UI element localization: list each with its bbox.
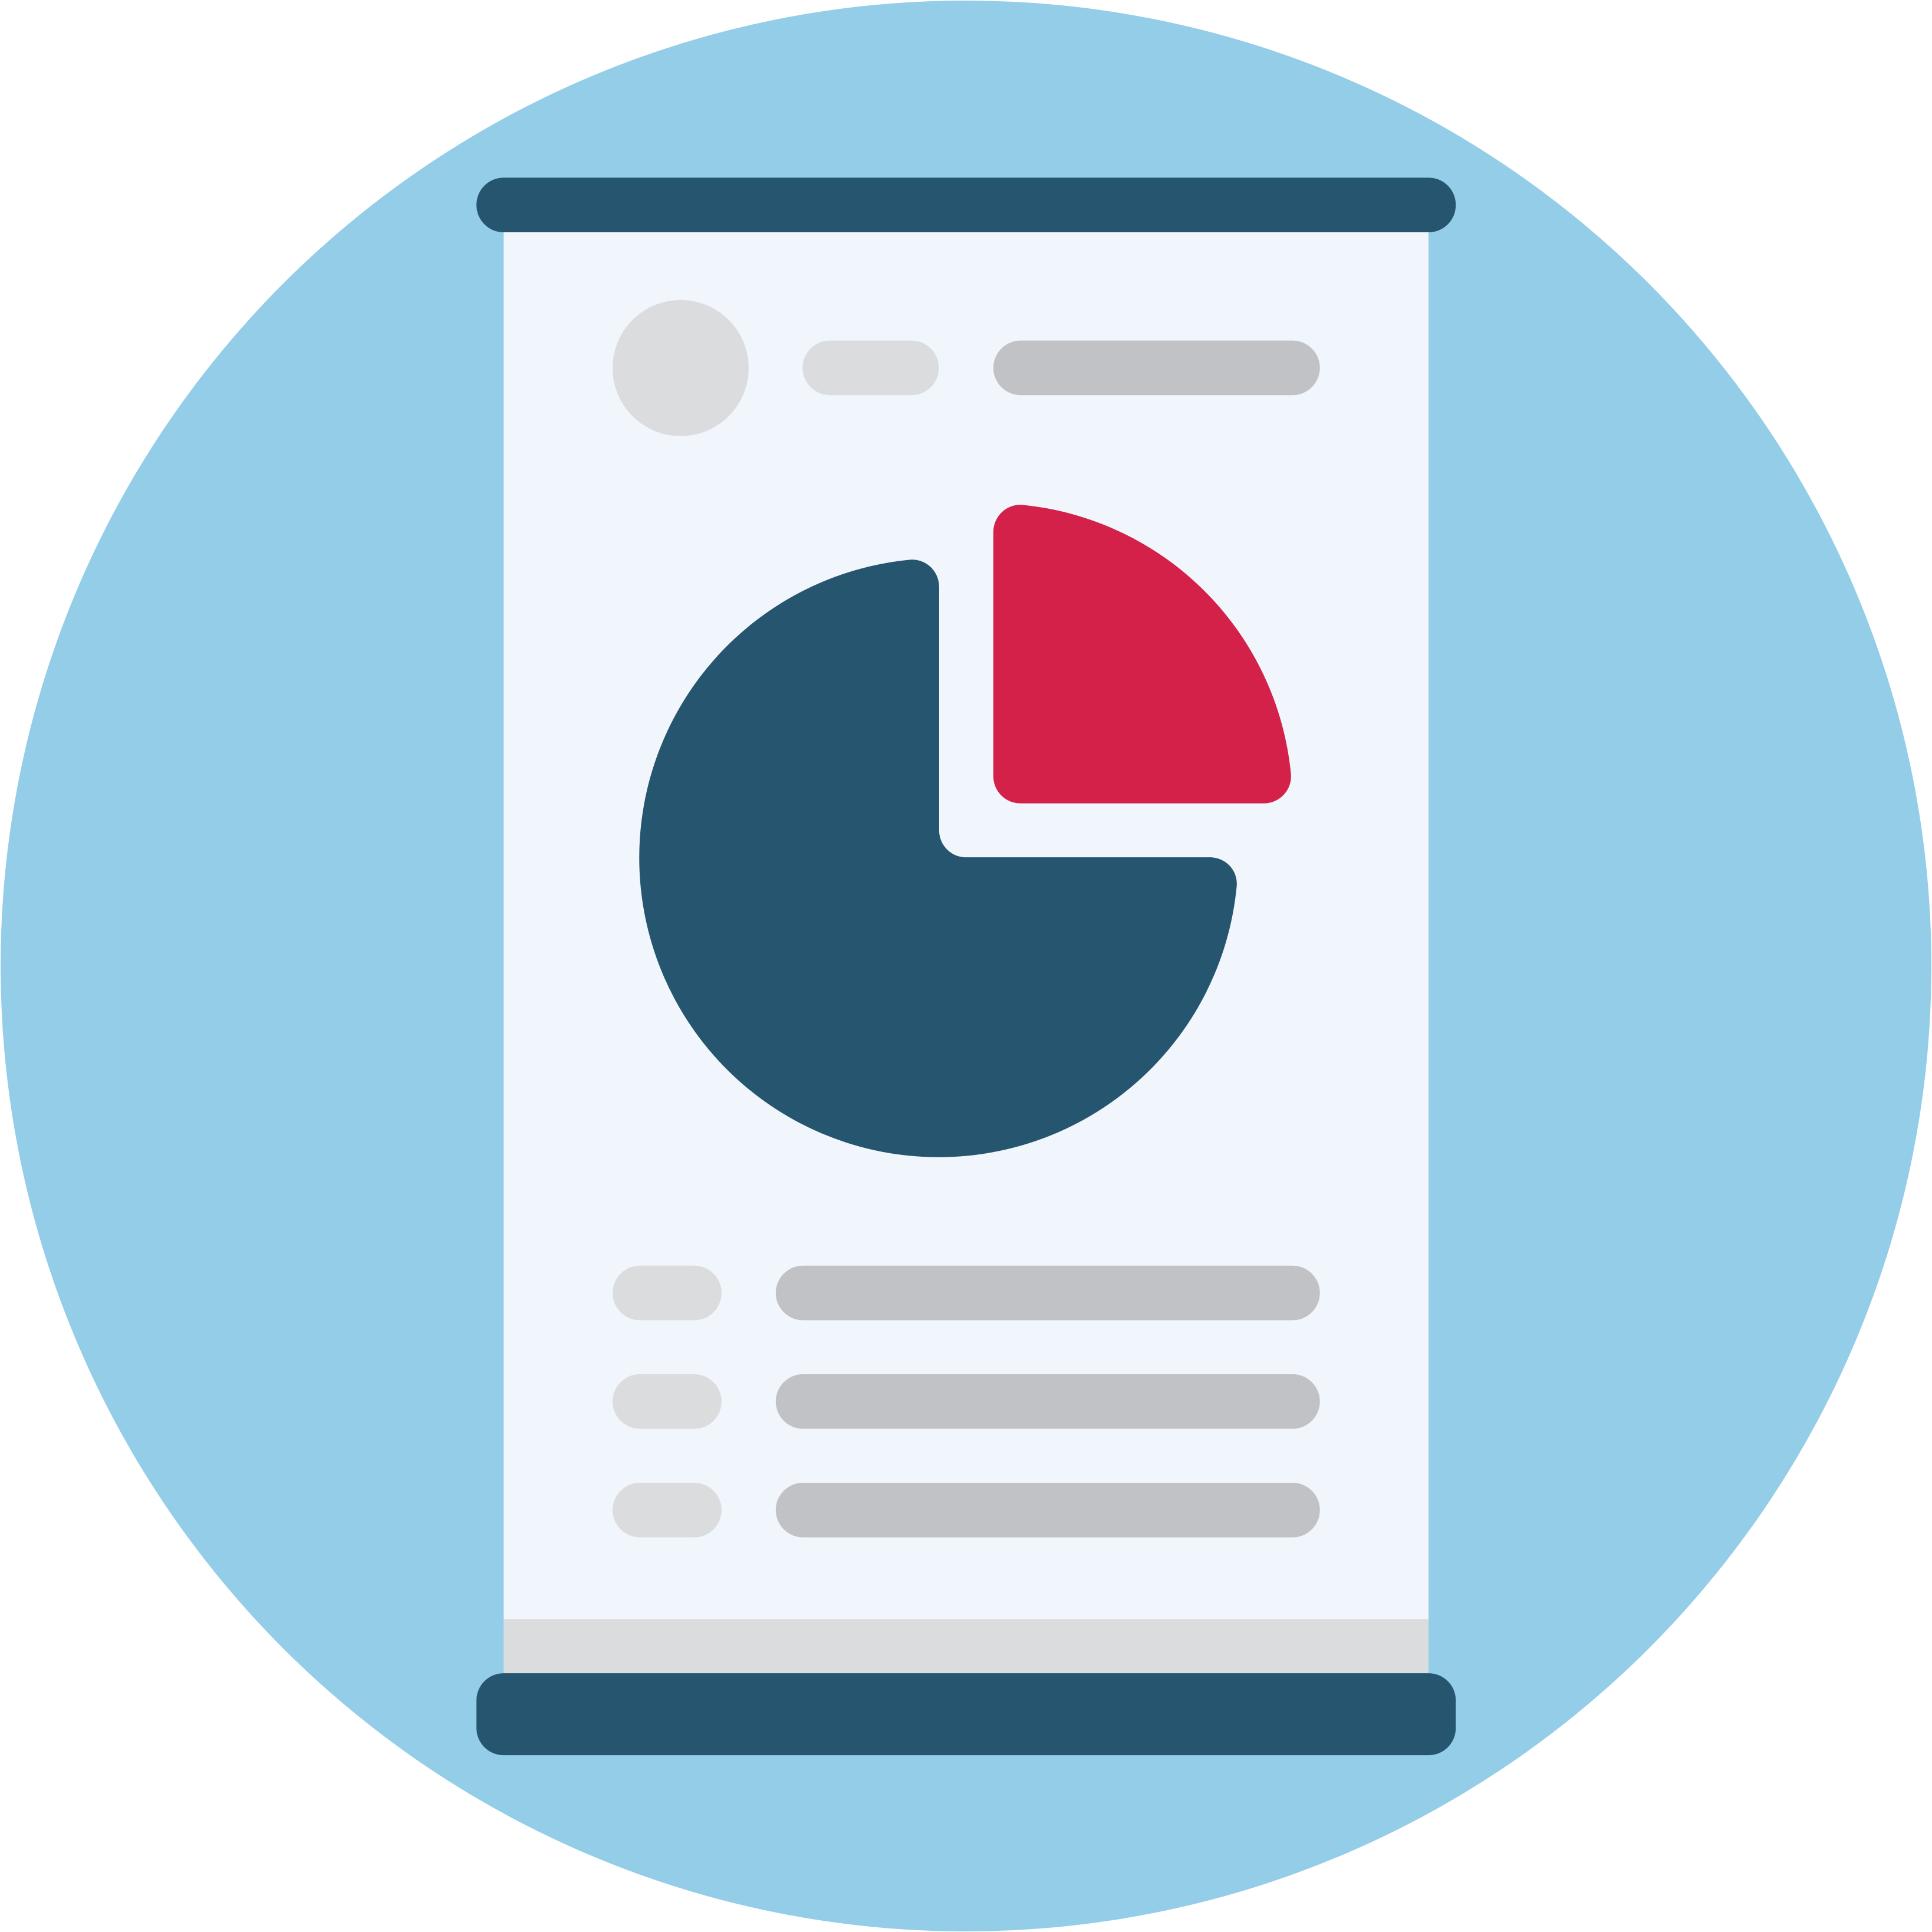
pie chart [639, 505, 1291, 1157]
row 2 label pill [613, 1374, 722, 1429]
row 2 value pill [776, 1374, 1320, 1429]
row 1 [613, 1266, 1320, 1320]
pie detached red slice [993, 505, 1291, 804]
roll-up banner [476, 177, 1456, 1755]
bottom base [476, 1673, 1456, 1755]
header long pill [993, 341, 1320, 395]
row 3 [613, 1483, 1320, 1538]
banner panel [503, 232, 1429, 1673]
header group [613, 300, 1320, 436]
header short pill [802, 341, 939, 395]
row 1 label pill [613, 1266, 722, 1320]
row 3 label pill [613, 1483, 722, 1538]
row 1 value pill [776, 1266, 1320, 1320]
row 3 value pill [776, 1483, 1320, 1538]
list rows [613, 1266, 1320, 1538]
top bar [476, 177, 1456, 232]
header logo circle [613, 300, 749, 436]
banner bottom strip [503, 1619, 1429, 1673]
row 2 [613, 1374, 1320, 1429]
pie large slice [639, 559, 1237, 1157]
